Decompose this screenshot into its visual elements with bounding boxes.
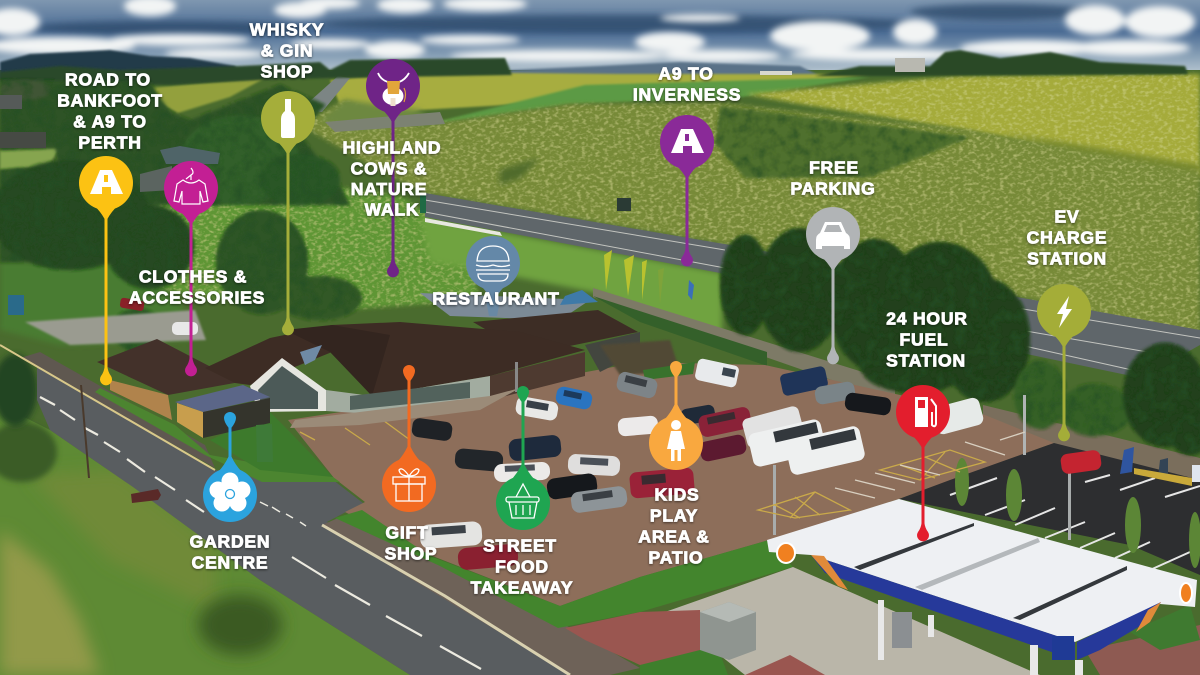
- left parking and outbuildings: [8, 295, 206, 345]
- label: EV charge station: STATION: [1027, 248, 1107, 268]
- label: garden centre: CENTRE: [192, 552, 268, 572]
- label: free parking: PARKING: [790, 178, 876, 198]
- sky with clouds: [0, 0, 1200, 78]
- pin: EV charge station: [1037, 284, 1091, 441]
- car park surface: [288, 362, 1054, 606]
- flags: [604, 250, 694, 304]
- label: road to Bankfoot: PERTH: [78, 132, 142, 152]
- pin: clothes and accessories: [164, 161, 218, 376]
- label: clothes and accessories: ACCESSORIES: [129, 288, 265, 308]
- label: A9 to Inverness: INVERNESS: [633, 84, 741, 104]
- restaurant building: [97, 290, 695, 462]
- label: whisky and gin shop: WHISKY: [250, 20, 324, 40]
- fuel station canopy: [767, 499, 1197, 675]
- label: garden centre: GARDEN: [190, 532, 270, 552]
- parking bay lines: [835, 432, 1025, 498]
- icon: basket: [506, 484, 539, 518]
- label: whisky and gin shop: SHOP: [261, 62, 313, 82]
- icon: highland cow: [378, 73, 409, 106]
- label: gift shop: GIFT: [385, 522, 429, 542]
- label: EV charge station: EV: [1055, 206, 1079, 226]
- icon: car: [816, 222, 850, 249]
- pin: garden centre: [203, 412, 257, 522]
- A9 dual carriageway: [420, 193, 1200, 378]
- label: 24 hour fuel station: 24 HOUR: [886, 308, 968, 328]
- label: free parking: FREE: [809, 158, 859, 178]
- pin: 24 hour fuel station: [896, 385, 950, 541]
- label: kids play area and patio: KIDS: [654, 484, 700, 504]
- label: highland cows and nature walk: NATURE: [351, 179, 427, 199]
- label: gift shop: SHOP: [385, 544, 437, 564]
- label: 24 hour fuel station: STATION: [886, 350, 966, 370]
- label: A9 to Inverness: A9 TO: [658, 64, 714, 84]
- icon: bottle: [281, 99, 295, 138]
- pin: gift shop: [382, 365, 436, 512]
- label: 24 hour fuel station: FUEL: [900, 330, 948, 350]
- label: street food takeaway: FOOD: [495, 556, 549, 576]
- main road and junction: [0, 345, 640, 675]
- pin: restaurant: [466, 236, 520, 316]
- icon: flower: [210, 472, 250, 512]
- label: clothes and accessories: CLOTHES &: [139, 266, 247, 286]
- hatched yellow bays: [300, 418, 985, 518]
- tree belts on the left: [0, 80, 362, 352]
- label: road to Bankfoot: & A9 TO: [73, 112, 147, 132]
- label: highland cows and nature walk: HIGHLAND: [343, 138, 441, 158]
- label: EV charge station: CHARGE: [1027, 228, 1107, 248]
- label: highland cows and nature walk: COWS &: [351, 158, 427, 178]
- label: street food takeaway: TAKEAWAY: [471, 578, 573, 598]
- EV charging tarmac: [773, 395, 1200, 575]
- icon: girl: [667, 420, 685, 461]
- forecourt and brick paving: [565, 567, 1200, 675]
- icon: lightning bolt: [1057, 296, 1072, 328]
- label: road to Bankfoot: BANKFOOT: [57, 90, 163, 110]
- label: road to Bankfoot: ROAD TO: [65, 70, 151, 90]
- distant tree lines and houses on the horizon: [0, 50, 1188, 85]
- label: street food takeaway: STREET: [483, 536, 557, 556]
- icon: burger: [476, 246, 510, 281]
- label: kids play area and patio: PLAY: [650, 506, 698, 526]
- icon: fuel pump: [915, 397, 928, 427]
- pin: highland cows: [366, 59, 420, 277]
- label: kids play area and patio: PATIO: [649, 548, 703, 568]
- houses among the trees: [0, 95, 220, 192]
- label: highland cows and nature walk: WALK: [365, 200, 419, 220]
- icon: gift box: [393, 469, 425, 501]
- grass and hedgerow at lower left: [0, 354, 410, 675]
- pin: whisky and gin shop: [261, 91, 315, 335]
- grass verges: [95, 388, 793, 675]
- label: kids play area and patio: AREA &: [638, 526, 710, 546]
- icon: jumper: [174, 168, 208, 204]
- pin: kids play area and patio: [649, 361, 703, 470]
- vehicles in the car park: [411, 358, 1102, 571]
- pin: street food takeaway: [496, 386, 550, 530]
- label: restaurant: RESTAURANT: [432, 288, 560, 308]
- pin: free parking: [806, 207, 860, 364]
- pin: road to Bankfoot: [79, 156, 133, 385]
- pin: A9 to Inverness: [660, 115, 714, 266]
- label: whisky and gin shop: & GIN: [261, 40, 313, 60]
- fence, hedge and treeline behind the car park: [593, 228, 1200, 484]
- icon: road: [90, 170, 123, 194]
- icon: road: [671, 129, 704, 153]
